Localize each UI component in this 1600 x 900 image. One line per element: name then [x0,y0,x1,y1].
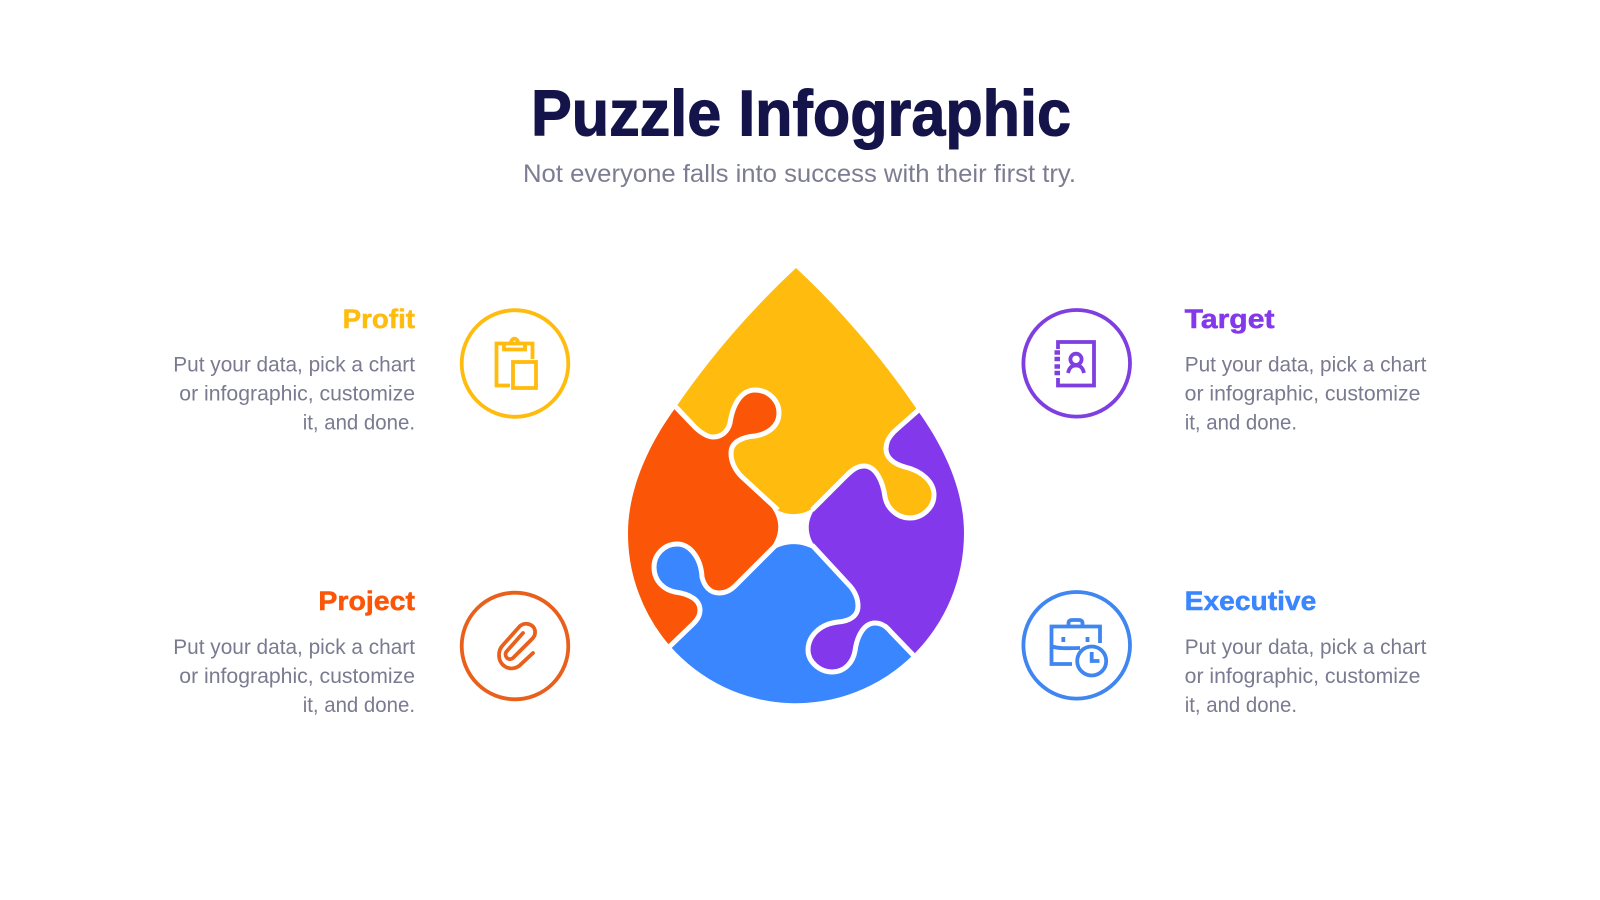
text block: target: Put your data, pick a chart [1185,354,1427,377]
text block: profit: Put your data, pick a chart [173,354,415,377]
text block: project [173,636,415,717]
text block: project: it, and done. [303,694,415,717]
puzzle piece: orange project [628,390,795,646]
puzzle piece: blue executive [654,528,913,703]
heading: executive: Executive [1185,586,1316,616]
text block: profit [173,354,415,435]
icon: address book [1023,310,1130,417]
panel: project [173,586,568,717]
heading: target: Target [1185,304,1275,334]
text block: project: or infographic, customize [179,665,415,688]
panel: executive [1023,586,1427,717]
puzzle drop chart [628,268,964,703]
title: Puzzle Infographic [531,76,1071,150]
text block: target: it, and done. [1185,412,1297,435]
text block: executive [1185,636,1427,717]
heading: profit: Profit [343,304,415,334]
subtitle: Not everyone falls into success with their first try. [523,160,1076,188]
heading: project: Project [318,586,415,616]
text block: executive: it, and done. [1185,694,1297,717]
text block: target [1185,354,1427,435]
text block: profit: it, and done. [303,412,415,435]
puzzle piece: purple target [795,411,964,672]
text block: executive: or infographic, customize [1185,665,1420,688]
puzzle piece: yellow profit [676,268,934,528]
icon: clipboard [462,310,568,417]
text block: project: Put your data, pick a chart [173,636,415,659]
panel: profit [173,304,568,435]
text block: profit: or infographic, customize [179,383,415,406]
panel: target [1023,304,1427,435]
icon: paperclip [462,593,568,699]
text block: executive: Put your data, pick a chart [1185,636,1427,659]
icon: briefcase with clock [1023,592,1130,699]
text block: target: or infographic, customize [1185,383,1420,406]
